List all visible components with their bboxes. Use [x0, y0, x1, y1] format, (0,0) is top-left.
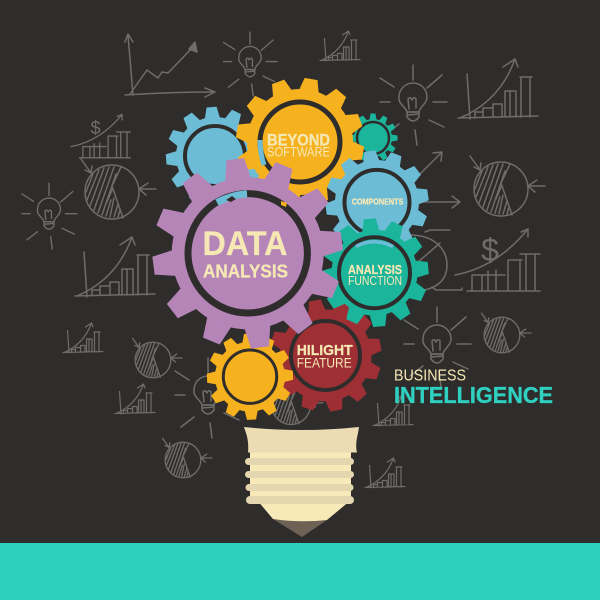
ring gap: blue showing through: [217, 194, 247, 202]
sketch: bottom right chart: [365, 458, 405, 488]
arrow: from components up right: [417, 152, 442, 177]
sketch: right pie: [470, 156, 545, 216]
gear: orange beyond software: [235, 77, 365, 207]
gear: red hilight feature: [269, 299, 382, 412]
gear: orange lower: [207, 333, 293, 420]
sketch: right small pie: [482, 313, 531, 353]
gear: purple data analysis: [152, 157, 344, 349]
label: analysis function: [348, 262, 402, 288]
sketch: top bulb: [224, 32, 277, 96]
gear: blue components: [325, 150, 429, 254]
bulb threads: [245, 458, 354, 504]
sketch: left dollar chart: [71, 114, 130, 158]
sketch: chart under title: [373, 396, 413, 426]
label: components: COMPONENTS: [352, 196, 404, 206]
bulb taper: [257, 500, 351, 521]
sketch: left bar chart: [75, 237, 155, 297]
title: business intelligence: BUSINESS: [394, 368, 466, 384]
title: business intelligence: INTELLIGENCE: [394, 382, 553, 408]
label: data analysis: DATA: [202, 225, 288, 263]
sketch: lower left small chart: [115, 384, 155, 414]
sketch: small pie left: [133, 338, 182, 378]
gear: blue top left: [166, 107, 264, 205]
ring gap: dark hole: [226, 196, 236, 202]
label: hilight feature: HILIGHT: [297, 342, 353, 359]
sketch: right dollar chart: [455, 229, 540, 291]
sketch: arc diagram: [405, 230, 462, 292]
label: data analysis: [202, 225, 288, 281]
arrow: from components right: [420, 196, 460, 208]
title: business intelligence: [394, 368, 553, 408]
bulb base: [244, 427, 359, 537]
ring gap: blue showing through: [356, 242, 393, 246]
teal footer band: [0, 543, 600, 600]
label: beyond software: SOFTWARE: [267, 144, 330, 160]
sketch: left pie: [81, 159, 156, 219]
label: hilight feature: FEATURE: [297, 355, 352, 371]
sketch: pie behind gears: [269, 381, 323, 424]
ring gap: orange showing through: [281, 201, 287, 207]
ring gap: blue showing through: [260, 140, 264, 165]
sketch: left dollar chart: $: [90, 118, 101, 138]
bulb tip: [273, 519, 327, 537]
bulb thread light: [250, 450, 351, 498]
sketch: bottom pie: [163, 438, 212, 478]
sketch: right bulb: [380, 65, 447, 145]
sketch: lower right bulb: [404, 307, 471, 387]
label: beyond software: [267, 131, 330, 160]
sketch: right bar chart: [458, 59, 538, 119]
label: analysis function: FUNCTION: [348, 273, 402, 288]
sketch: line chart top left: [125, 34, 215, 97]
gear: teal analysis function: [320, 218, 429, 327]
label: beyond software: BEYOND: [267, 131, 330, 150]
bulb cap: [244, 427, 359, 452]
sketch: top small chart: [320, 31, 360, 61]
gear: small green: [348, 114, 398, 162]
label: analysis function: ANALYSIS: [348, 262, 402, 277]
sketch: small chart left: [63, 323, 103, 353]
sketch: right dollar chart: $: [481, 232, 499, 268]
sketches: doodled charts and bulbs: [22, 31, 545, 488]
label: data analysis: ANALYSIS: [203, 261, 288, 281]
sketch: lower left bulb: [175, 358, 242, 438]
sketch: left bulb: [22, 183, 77, 249]
label: hilight feature: [297, 342, 353, 371]
